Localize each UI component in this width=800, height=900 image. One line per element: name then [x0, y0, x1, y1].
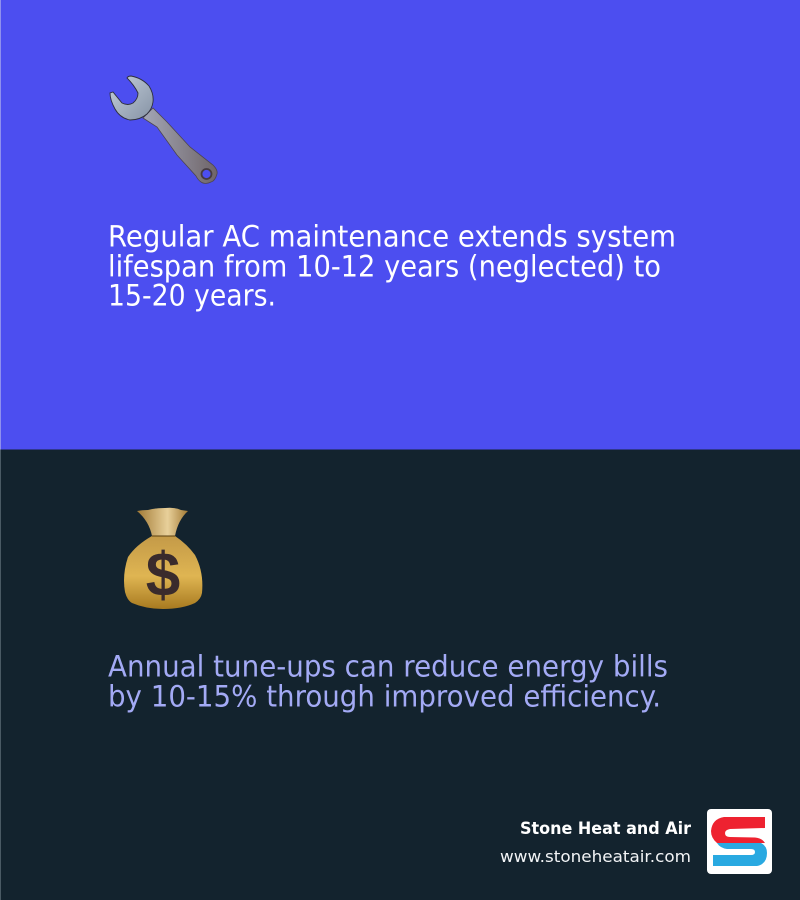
brand name: Stone Heat and Air [520, 819, 692, 839]
text: maintenance lifespan statement [108, 220, 676, 312]
text: energy savings statement [108, 650, 668, 714]
icon: company logo [707, 809, 772, 874]
text: energy savings statement: Annual tune-ups can reduce energy bills [108, 650, 668, 684]
dollar sign: $ [146, 541, 180, 610]
website: www.stoneheatair.com [500, 847, 691, 866]
icon: money bag [124, 508, 202, 610]
icon: wrench [110, 76, 217, 184]
text: maintenance lifespan statement: Regular AC maintenance extends system [108, 220, 676, 254]
text: maintenance lifespan statement: 15-20 years. [108, 278, 276, 312]
panel: bottom dark background [0, 450, 800, 900]
panel: top indigo background [0, 0, 800, 450]
text: energy savings statement: by 10-15% through improved efficiency. [108, 680, 661, 714]
text: maintenance lifespan statement: lifespan from 10-12 years (neglected) to [108, 250, 661, 284]
